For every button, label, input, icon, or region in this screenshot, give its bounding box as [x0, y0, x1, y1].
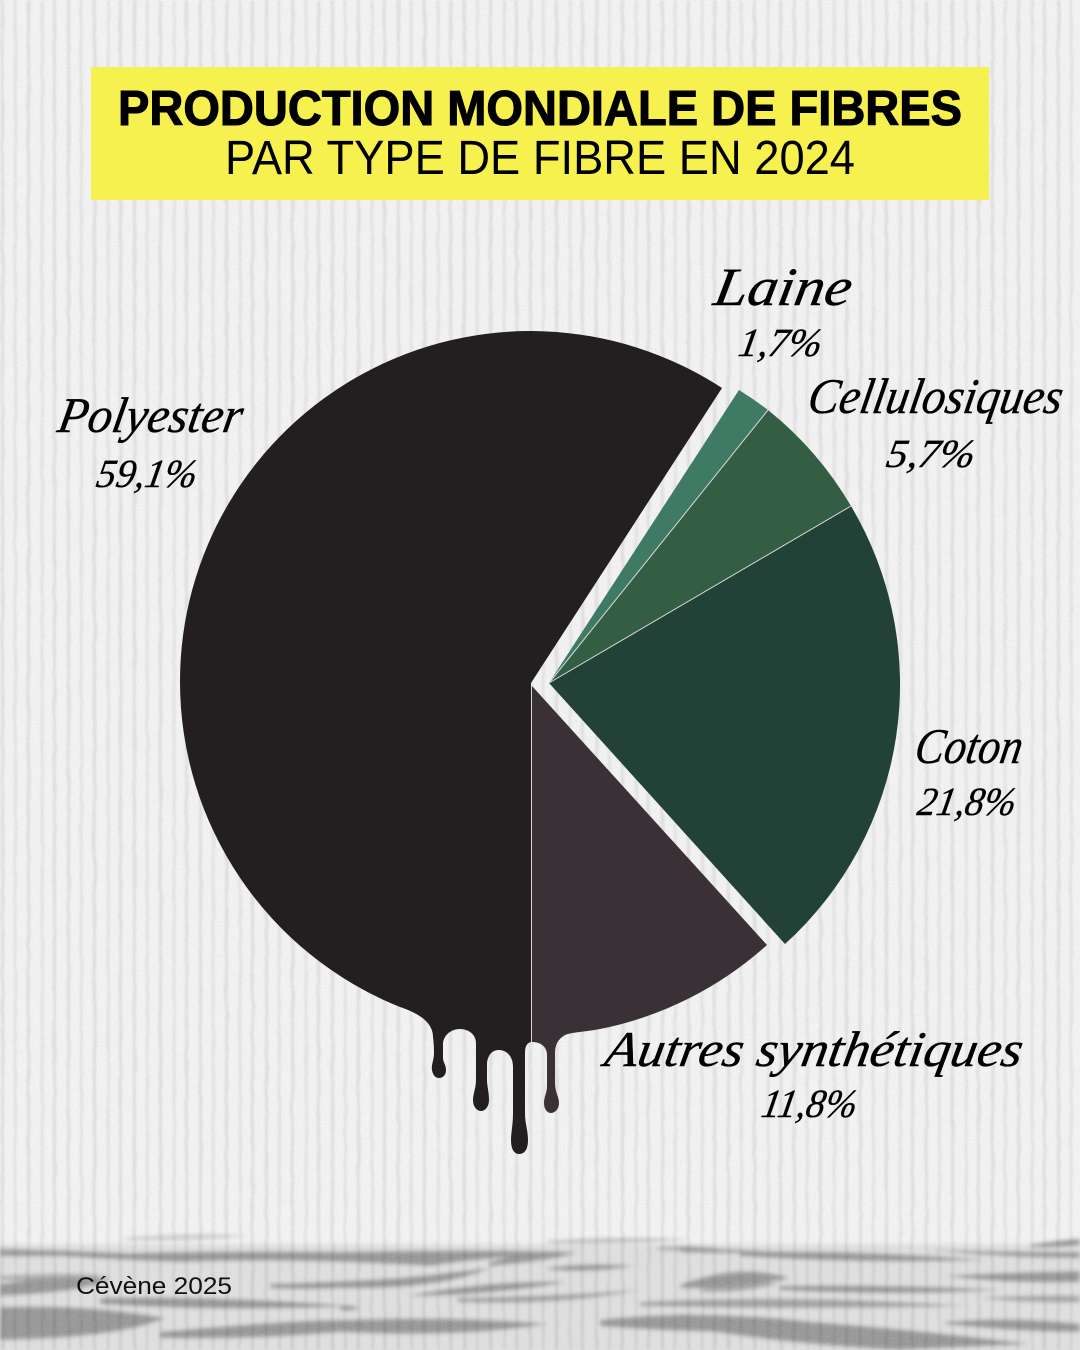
- pie chart: [180, 331, 900, 1154]
- water reflection strip: [0, 1234, 1080, 1350]
- label: cellulosiques: 5,7%: [883, 431, 979, 476]
- slice: coton: [549, 506, 900, 944]
- label: autres synthétiques: [598, 1021, 1028, 1126]
- label: laine: Laine: [709, 257, 857, 317]
- slice: cellulosiques: [549, 410, 851, 683]
- label: polyester: [53, 387, 248, 496]
- source credit: Cévène 2025: [76, 1273, 232, 1300]
- slice: polyester with drips: [180, 331, 722, 1154]
- title line 2: PAR TYPE DE FIBRE EN 2024: [225, 132, 855, 185]
- label: coton: 21,8%: [914, 779, 1020, 824]
- label: laine: [709, 257, 857, 365]
- title line 1: PRODUCTION MONDIALE DE FIBRES: [118, 82, 962, 136]
- label: coton: Coton: [911, 718, 1028, 774]
- slice: laine: [549, 390, 768, 683]
- label: polyester: 59,1%: [93, 451, 201, 496]
- slice: autres synthétiques: [532, 686, 767, 1113]
- label: laine: 1,7%: [735, 320, 826, 365]
- label: autres synthétiques: Autres synthétiques: [598, 1021, 1028, 1077]
- label: polyester: Polyester: [53, 387, 248, 443]
- label: cellulosiques: Cellulosiques: [804, 368, 1068, 424]
- title banner: [91, 67, 989, 200]
- label: cellulosiques: [804, 368, 1068, 476]
- label: coton: [911, 718, 1028, 824]
- label: autres synthétiques: 11,8%: [758, 1081, 861, 1126]
